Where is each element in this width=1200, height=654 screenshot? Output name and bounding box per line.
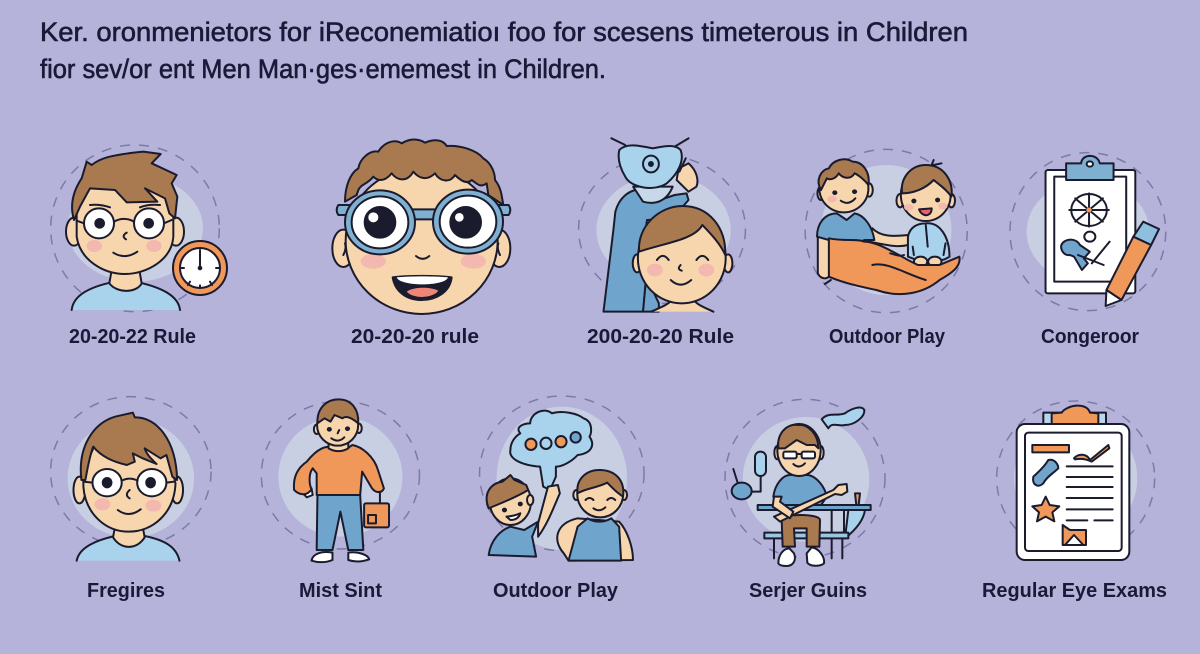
panel: 20-20-22 rule boy with clock (51, 145, 227, 312)
panel: fregires boy with glasses (51, 397, 211, 561)
panel: regular eye exams checklist clipboard (997, 401, 1155, 560)
label: Congeroor: Congeroor (1041, 326, 1139, 348)
title: Ker. oronmenietors for iReconemiatioı foo for scesens timeterous in Children (40, 17, 968, 47)
panel: 200-20-20 rule doctor and child (579, 138, 745, 312)
panel: outdoor play two children on a hand (805, 149, 967, 313)
label: Outdoor Play top: Outdoor Play (829, 326, 946, 348)
panel: 20-20-20 rule big smiling face (332, 139, 510, 314)
panel: congeroor clipboard with pencil (1010, 153, 1166, 311)
label: Regular Eye Exams: Regular Eye Exams (982, 580, 1167, 602)
label: Mist Sint: Mist Sint (299, 580, 382, 602)
panel: outdoor play children and thought cloud (480, 396, 644, 561)
label: Fregires: Fregires (87, 580, 165, 602)
panel: mist sint standing boy with bag (261, 399, 419, 562)
title (40, 17, 968, 84)
label: 20-20-20 rule: 20-20-20 rule (351, 326, 479, 348)
label: Outdoor Play bottom: Outdoor Play (493, 580, 619, 602)
label: Serjer Guins: Serjer Guins (749, 580, 867, 602)
label: 200-20-20 Rule: 200-20-20 Rule (587, 326, 734, 348)
label: 20-20-22 Rule: 20-20-22 Rule (69, 326, 196, 348)
title: fior sev/or ent Men Man·ges·ememest in Children. (40, 54, 606, 84)
panel: serjer guins seated boy at bench (725, 399, 885, 566)
